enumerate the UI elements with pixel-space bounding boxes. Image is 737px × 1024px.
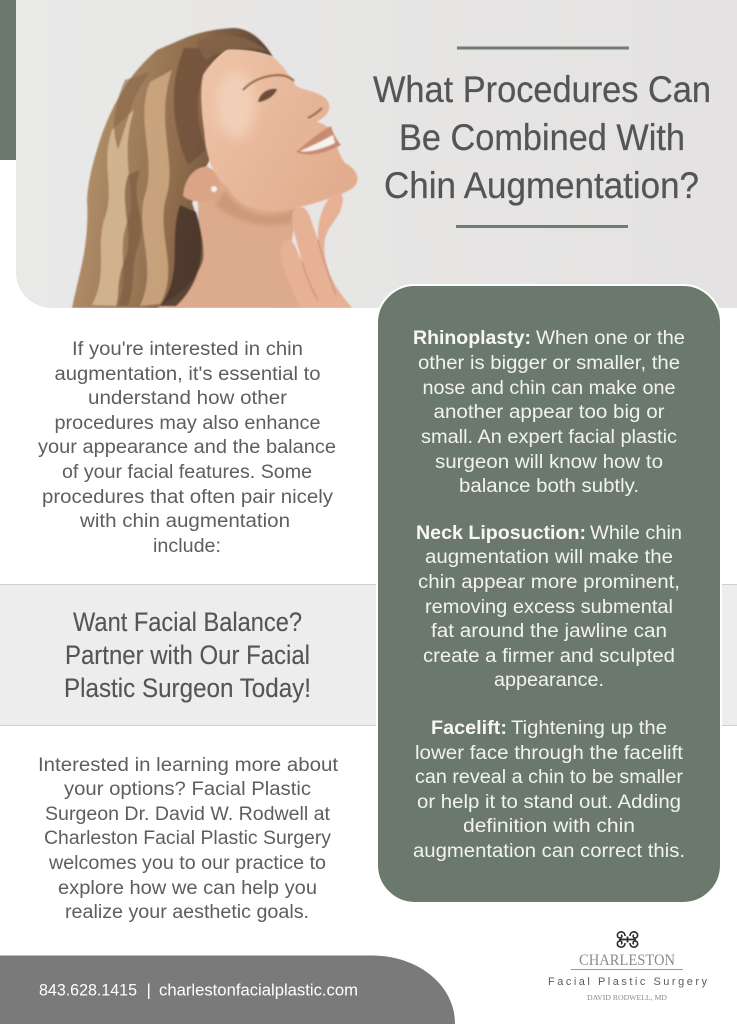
hair xyxy=(72,28,273,308)
intro paragraph: If you're interested in chin xyxy=(72,339,303,360)
closing paragraph xyxy=(38,755,339,923)
intro paragraph: procedures that often pair nicely xyxy=(42,487,334,508)
procedure: facelift: Facelift: xyxy=(431,718,507,739)
forehead highlight xyxy=(216,71,256,139)
title rule top xyxy=(457,46,629,50)
procedure: neck liposuction: chin appear more prominent, xyxy=(418,572,680,593)
procedure: rhinoplasty: balance both subtly. xyxy=(459,476,639,497)
face xyxy=(183,50,358,211)
procedure: neck liposuction: While chin xyxy=(590,523,682,544)
contact details xyxy=(39,980,358,1000)
procedure: rhinoplasty: other is bigger or smaller, the xyxy=(418,353,680,374)
procedure: rhinoplasty: surgeon will know how to xyxy=(435,452,663,473)
contact details: 843.628.1415 xyxy=(39,980,137,1000)
title block xyxy=(373,46,711,228)
intro paragraph xyxy=(38,339,336,557)
closing paragraph: your options? Facial Plastic xyxy=(64,779,311,800)
green corner block xyxy=(0,0,16,160)
title rule bottom xyxy=(456,225,628,228)
smile xyxy=(296,126,341,154)
procedure: facelift: augmentation can correct this. xyxy=(413,841,685,862)
procedure: rhinoplasty: nose and chin can make one xyxy=(422,378,676,399)
footer contact bar xyxy=(0,956,455,1024)
icon: scroll ornament xyxy=(617,932,638,947)
intro paragraph: include: xyxy=(153,536,221,557)
intro paragraph: your appearance and the balance xyxy=(38,437,336,458)
closing paragraph: Charleston Facial Plastic Surgery xyxy=(44,828,332,849)
procedure: neck liposuction: augmentation will make the xyxy=(425,547,673,568)
procedure: neck liposuction: appearance. xyxy=(494,670,604,691)
intro paragraph: procedures may also enhance xyxy=(54,413,320,434)
neck and shoulder xyxy=(145,165,302,308)
closing paragraph: welcomes you to our practice to xyxy=(48,853,326,874)
band heading: Plastic Surgeon Today! xyxy=(64,673,311,703)
title text: What Procedures Can xyxy=(373,68,711,110)
closing paragraph: Interested in learning more about xyxy=(38,755,339,776)
logo wordmark: CHARLESTON xyxy=(579,952,675,969)
eye and brow xyxy=(243,75,294,102)
logo subtitle: Facial Plastic Surgery xyxy=(548,976,708,988)
procedure: neck liposuction: create a firmer and sculpted xyxy=(423,646,675,667)
band heading: Want Facial Balance? xyxy=(73,607,302,637)
closing paragraph: Surgeon Dr. David W. Rodwell at xyxy=(45,804,331,825)
contact details: | xyxy=(146,980,151,1000)
contact details: charlestonfacialplastic.com xyxy=(159,980,358,1000)
title text: Be Combined With xyxy=(399,116,685,158)
intro paragraph: of your facial features. Some xyxy=(62,462,312,483)
procedure: rhinoplasty: Rhinoplasty: xyxy=(413,328,531,349)
hand on neck xyxy=(280,193,352,308)
procedure: neck liposuction: removing excess submental xyxy=(425,597,673,618)
band heading: Partner with Our Facial xyxy=(65,640,310,670)
procedure: facelift: definition with chin xyxy=(463,816,635,837)
procedure: facelift: or help it to stand out. Adding xyxy=(417,792,681,813)
nostril xyxy=(308,108,322,118)
procedure: facelift: lower face through the facelift xyxy=(415,743,684,764)
ear with earring xyxy=(183,167,221,202)
procedure: facelift xyxy=(413,718,685,862)
title text: Chin Augmentation? xyxy=(384,164,699,206)
procedure: rhinoplasty xyxy=(413,328,685,497)
header image panel: woman lifting her chin xyxy=(16,0,737,308)
intro paragraph: understand how other xyxy=(88,388,288,409)
logo xyxy=(548,932,708,1002)
band heading xyxy=(64,607,311,703)
procedure: neck liposuction: fat around the jawline can xyxy=(431,621,667,642)
procedure: facelift: can reveal a chin to be smaller xyxy=(415,767,684,788)
procedure: rhinoplasty: small. An expert facial plastic xyxy=(421,427,677,448)
title text xyxy=(373,68,711,206)
panel: procedures card xyxy=(377,285,721,903)
procedure: facelift: Tightening up the xyxy=(511,718,667,739)
closing paragraph: explore how we can help you xyxy=(58,878,317,899)
closing paragraph: realize your aesthetic goals. xyxy=(65,902,309,923)
logo doctor name: DAVID RODWELL, MD xyxy=(587,994,667,1002)
procedure: rhinoplasty: another appear too big or xyxy=(434,402,665,423)
intro paragraph: augmentation, it's essential to xyxy=(54,364,320,385)
call-to-action band xyxy=(0,584,737,726)
intro paragraph: with chin augmentation xyxy=(79,511,290,532)
procedure: neck liposuction xyxy=(416,523,682,691)
procedure: rhinoplasty: When one or the xyxy=(536,328,685,349)
procedure: neck liposuction: Neck Liposuction: xyxy=(416,523,586,544)
